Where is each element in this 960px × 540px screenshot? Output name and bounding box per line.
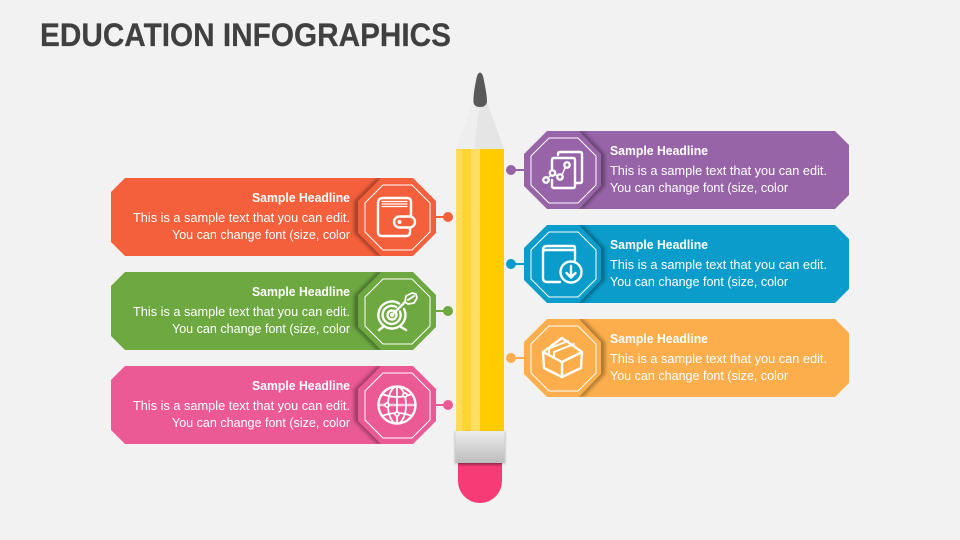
connector (506, 259, 524, 269)
panel: orange wallet (111, 178, 453, 256)
panel: blue book (506, 225, 849, 303)
body text: This is a sample text that you can edit. (133, 210, 350, 225)
panel: pink globe: You can change font (size, color (172, 415, 351, 430)
connector (436, 306, 453, 316)
icon: book with download (543, 246, 582, 282)
pencil body (456, 149, 504, 432)
icon: globe (378, 386, 416, 424)
panel: green target: You can change font (size, color (172, 321, 351, 336)
connector (506, 353, 524, 363)
panel: amber box (506, 319, 849, 397)
headline: Sample Headline (610, 238, 708, 252)
pencil lead (473, 72, 487, 107)
icon: pages with chart (543, 152, 582, 188)
body text: This is a sample text that you can edit. (610, 163, 827, 178)
panel: purple pages (506, 131, 849, 209)
pencil (454, 72, 506, 503)
body text: This is a sample text that you can edit. (133, 304, 350, 319)
headline: Sample Headline (610, 144, 708, 158)
title: EDUCATION INFOGRAPHICS (40, 17, 451, 53)
icon: box (543, 338, 582, 377)
pencil eraser (458, 463, 502, 503)
body text: This is a sample text that you can edit. (610, 257, 827, 272)
panel: green target (111, 272, 453, 350)
headline: Sample Headline (610, 332, 708, 346)
panel: orange wallet: You can change font (size, color (172, 227, 351, 242)
headline: Sample Headline (252, 379, 350, 393)
panel: pink globe (111, 366, 453, 444)
pencil ferrule (454, 431, 506, 464)
body text: This is a sample text that you can edit. (133, 398, 350, 413)
panel: purple pages: You can change font (size, color (610, 180, 789, 195)
connector (436, 400, 453, 410)
body text: This is a sample text that you can edit. (610, 351, 827, 366)
panel: amber box: You can change font (size, color (610, 368, 789, 383)
connector (506, 165, 524, 175)
icon: target (378, 293, 417, 330)
headline: Sample Headline (252, 285, 350, 299)
icon: wallet (378, 198, 415, 236)
panel: blue book: You can change font (size, color (610, 274, 789, 289)
headline: Sample Headline (252, 191, 350, 205)
connector (436, 212, 453, 222)
pencil wood tip (456, 102, 504, 149)
